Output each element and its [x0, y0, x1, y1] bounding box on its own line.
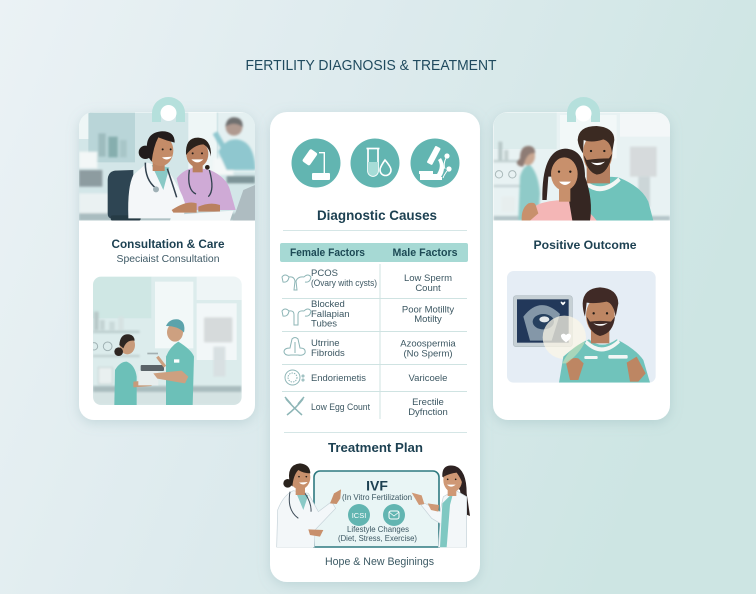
row: blocked fallopian tubes: Fallapian — [311, 309, 350, 320]
device — [141, 365, 164, 371]
table header: Female Factors — [290, 247, 365, 259]
icon: uterus with cysts — [282, 275, 311, 290]
row: low egg count: Erectile — [412, 397, 444, 408]
heading: consultation and care: Consultation & Care — [112, 237, 225, 251]
row: PCOS: PCOS — [311, 268, 338, 279]
ultrasound monitor — [513, 296, 572, 347]
table header — [280, 243, 468, 262]
icon: microscope and sperm — [410, 138, 460, 188]
left doctor — [277, 463, 341, 547]
row: uterine fibroids: Fibroids — [311, 348, 345, 359]
illustration: ultrasound and positive test — [504, 268, 658, 385]
icon: card hanger tab — [152, 97, 185, 122]
card background — [493, 112, 670, 420]
icon: lab microscope — [292, 138, 340, 188]
row: endometriosis: Varicoele — [409, 373, 447, 384]
icon: uterus — [282, 309, 311, 325]
row: PCOS — [282, 268, 452, 294]
heading: diagnostic causes: Diagnostic Causes — [317, 207, 437, 223]
woman — [527, 200, 597, 221]
row: low egg count: Dyfnction — [408, 407, 448, 418]
icon: fibroids — [284, 338, 305, 355]
man — [585, 177, 653, 221]
row: blocked fallopian tubes: Tubes — [311, 318, 337, 330]
row: PCOS: Low Sperm — [404, 273, 452, 284]
treatment board: (Diet, Stress, Exercise) — [338, 533, 417, 543]
man with test strip — [559, 339, 650, 383]
row: uterine fibroids: Utrrine — [311, 338, 340, 349]
row: endometriosis — [285, 370, 447, 385]
heading: positive outcome: Positive Outcome — [534, 238, 637, 252]
patient — [177, 167, 236, 210]
row: blocked fallopian tubes: Poor Motillty — [402, 304, 454, 316]
illustration: lab staff — [90, 273, 245, 408]
row: blocked fallopian tubes: Motilty — [414, 314, 442, 325]
technician — [166, 342, 194, 405]
row: low egg count: Low Egg Count — [311, 402, 370, 413]
title: FERTILITY DIAGNOSIS & TREATMENT — [246, 57, 496, 74]
caption: hope and new beginnings: Hope & New Beginings — [325, 556, 434, 568]
right doctor — [412, 466, 470, 547]
hands and desk — [172, 202, 197, 213]
table: diagnostic factors — [280, 243, 468, 419]
icon: ICSI: ICSI — [352, 511, 366, 520]
treatment board: (In Vitro Fertilization — [342, 492, 412, 502]
icon: crossed tubes — [285, 397, 304, 415]
row: uterine fibroids: (No Sperm) — [403, 348, 453, 360]
treatment board: IVF — [366, 478, 388, 494]
subheading: specialist consultation: Speciaist Consultation — [116, 253, 220, 265]
glow and heart — [543, 316, 586, 359]
row: PCOS: (Ovary with cysts) — [311, 278, 377, 289]
assistant — [114, 362, 137, 405]
icon: test tube and drop — [350, 138, 400, 188]
chair — [108, 170, 133, 218]
row: uterine fibroids — [284, 338, 456, 360]
treatment board — [314, 471, 439, 547]
illustration: happy couple — [491, 110, 673, 222]
card background — [79, 112, 255, 420]
card background — [270, 112, 480, 582]
illustration: doctor and patient — [77, 110, 257, 222]
row: blocked fallopian tubes — [282, 299, 454, 330]
panel: diagnostic causes and treatment — [270, 112, 480, 582]
row: endometriosis: Endoriemetis — [311, 373, 366, 384]
doctor — [128, 163, 186, 218]
row: low egg count — [285, 397, 448, 418]
illustration: presenting doctors — [277, 463, 470, 547]
icon: lifestyle — [383, 504, 405, 526]
icon: endometriosis — [285, 370, 304, 385]
row: blocked fallopian tubes: Blocked — [311, 299, 345, 310]
panel: positive outcome — [491, 97, 673, 420]
row: uterine fibroids: Azoospermia — [400, 338, 456, 350]
treatment board: Lifestyle Changes — [347, 524, 409, 534]
table header: Male Factors — [392, 247, 458, 259]
icon: card hanger tab — [567, 97, 600, 122]
row: PCOS: Count — [415, 283, 441, 294]
heading: treatment plan: Treatment Plan — [328, 440, 423, 455]
panel: consultation and care — [77, 97, 257, 420]
